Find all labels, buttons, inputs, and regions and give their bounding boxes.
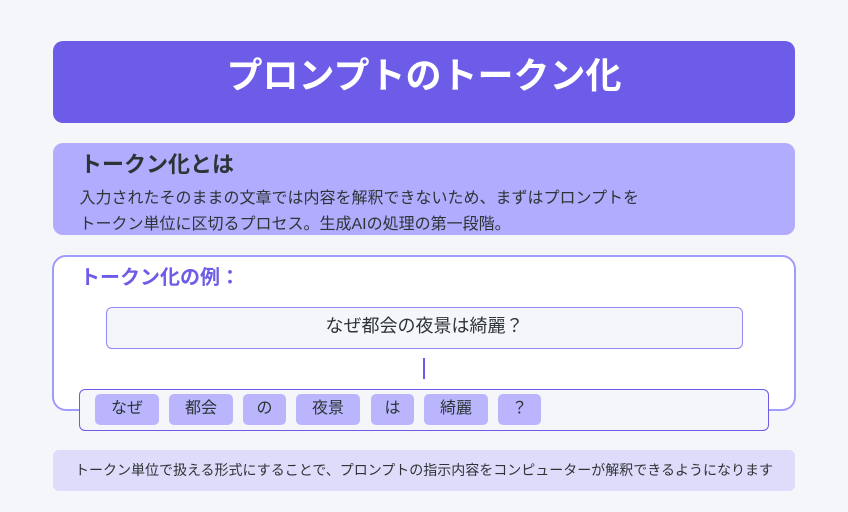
token: 綺麗 bbox=[424, 394, 488, 425]
token: 綺麗: 綺麗 bbox=[440, 400, 472, 417]
token: 夜景 bbox=[296, 394, 360, 425]
footer note bbox=[53, 450, 795, 491]
token: の bbox=[243, 394, 286, 425]
token: は: は bbox=[384, 400, 400, 417]
title banner: プロンプトのトークン化 bbox=[227, 55, 621, 96]
token: の: の bbox=[256, 400, 272, 417]
connector line bbox=[423, 358, 425, 379]
token: ？: ？ bbox=[511, 400, 528, 417]
definition heading: トークン化とは bbox=[80, 152, 234, 177]
token row bbox=[79, 389, 769, 431]
footer note: トークン単位で扱える形式にすることで、プロンプトの指示内容をコンピューターが解釈できるようになります bbox=[75, 462, 773, 478]
title banner bbox=[53, 41, 795, 123]
token: は bbox=[371, 394, 414, 425]
original prompt box: なぜ都会の夜景は綺麗？ bbox=[326, 316, 524, 336]
panel: definition bbox=[53, 143, 795, 235]
token: なぜ: なぜ bbox=[111, 400, 143, 417]
panel: tokenization example bbox=[52, 255, 796, 411]
token: ？ bbox=[498, 394, 541, 425]
token: 都会: 都会 bbox=[185, 400, 217, 417]
example heading: トークン化の例： bbox=[80, 267, 240, 289]
token: なぜ bbox=[95, 394, 159, 425]
definition text bbox=[80, 189, 639, 233]
token: 夜景: 夜景 bbox=[312, 400, 344, 417]
token: 都会 bbox=[169, 394, 233, 425]
definition text: 入力されたそのままの文章では内容を解釈できないため、まずはプロンプトを bbox=[80, 190, 639, 207]
definition text: トークン単位に区切るプロセス。生成AIの処理の第一段階。 bbox=[80, 216, 511, 233]
original prompt box bbox=[106, 307, 743, 349]
